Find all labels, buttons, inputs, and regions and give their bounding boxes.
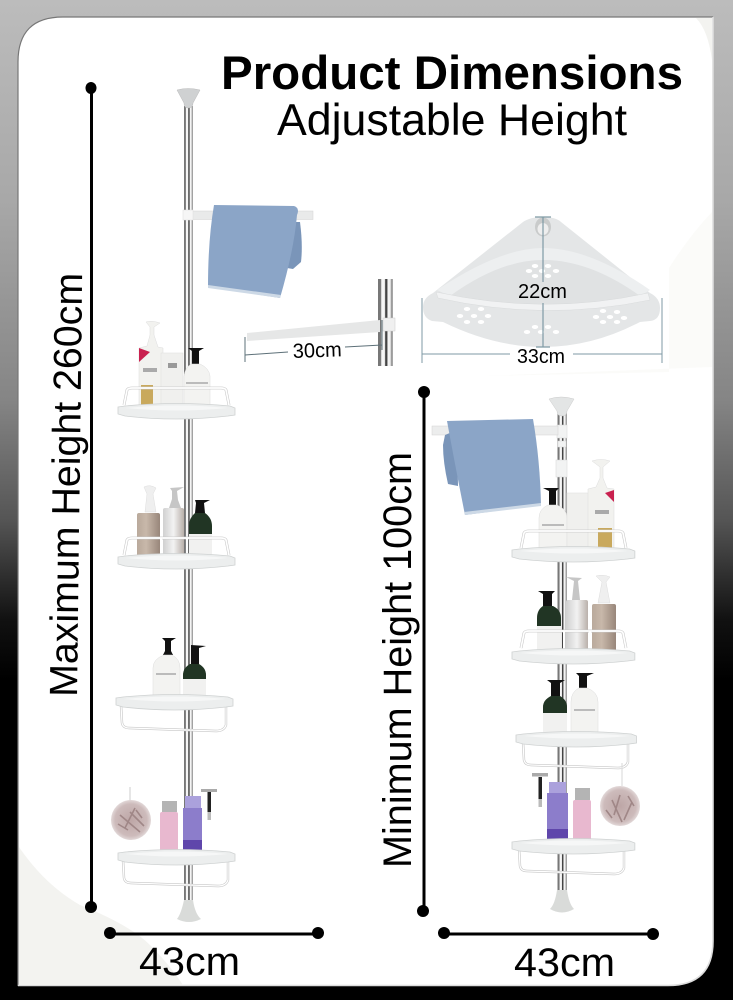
white bottle [571,673,598,737]
towel bar [183,210,313,220]
shelf tray [512,648,635,664]
drain holes [457,264,627,334]
second shelf [118,486,235,569]
front bar [436,292,650,311]
black pump bottle [539,488,567,551]
dimension line [245,320,382,362]
top cap [549,397,574,416]
pink bottle [160,801,178,856]
pole [558,410,567,892]
loofah [111,787,151,840]
arm [247,320,380,341]
raised band [437,248,650,296]
rail [521,531,626,548]
dark green bottle [189,500,212,558]
tray body [423,217,660,347]
heading: Product Dimensions: Product Dimensions [221,47,683,100]
pink bottle [573,788,591,845]
green bottle [537,591,561,654]
champagne bottle [137,486,160,558]
rail [521,631,626,648]
tube [161,353,183,407]
base foot [177,900,201,922]
second shelf [512,575,635,664]
silver bottle [566,577,588,654]
white bottle [153,638,180,701]
title [221,47,683,145]
label: 22cm: 22cm [518,280,567,303]
loofah [600,763,640,826]
third shelf [516,673,637,768]
towel [208,205,302,298]
dimension: minimum height line [417,386,430,917]
label: 33cm: 33cm [517,345,565,368]
towel bar [432,426,558,435]
bottom shelf [111,787,235,886]
towel rail [123,860,228,886]
rail [124,388,229,405]
top shelf [512,460,635,562]
label: Maximum Height 260cm: Maximum Height 260cm [42,273,91,697]
panel swoosh: bottom left [19,847,183,985]
rail [124,538,229,555]
top shelf [118,321,235,419]
label: 30cm: 30cm [292,338,342,363]
purple bottle [183,796,202,856]
razor [201,789,217,820]
champagne bottle [592,575,616,654]
bottom shelf [512,763,640,874]
shelf tray [118,554,235,569]
width dimension line [422,298,662,363]
top cap [177,88,200,108]
razor [532,773,548,807]
tube [567,493,590,551]
label: Minimum Height 100cm: Minimum Height 100cm [376,452,420,868]
towel rail [519,848,624,874]
corner tray detail with dimensions [422,217,662,368]
shelf tray [118,850,235,865]
label: left 43cm: 43cm [139,940,240,984]
towel [443,419,541,515]
black pump bottle [184,348,210,407]
shelf tray [118,404,235,419]
shelf tray [516,732,637,747]
towel arm detail with 30cm dimension [245,279,395,366]
left shower caddy: maximum height [111,88,313,922]
shelf tray [512,546,635,562]
green bottle [543,680,567,737]
mount hole [535,218,551,236]
towel rail [121,705,226,731]
pole clips [556,425,567,477]
towel rail [523,742,628,768]
depth dimension line [535,217,551,347]
green bottle [183,645,206,701]
pole section [378,279,393,366]
base foot [550,890,574,912]
subheading: Adjustable Height: Adjustable Height [277,96,628,145]
dimension: left width line [104,927,324,939]
silver bottle [163,487,184,558]
shelf tray [116,694,233,710]
shelf tray [512,838,635,854]
dimension: maximum height line [85,82,97,913]
tall pump bottle [588,460,614,551]
panel swoosh: top right [696,18,712,60]
panel swoosh: right side [482,212,712,376]
right shower caddy: minimum height [432,397,640,912]
third shelf [116,638,233,731]
purple bottle [547,782,568,845]
pole [184,106,193,902]
tall pump bottle [139,321,163,407]
label: right 43cm: 43cm [514,941,615,985]
basin [450,260,640,304]
dimension: right width line [438,927,659,940]
